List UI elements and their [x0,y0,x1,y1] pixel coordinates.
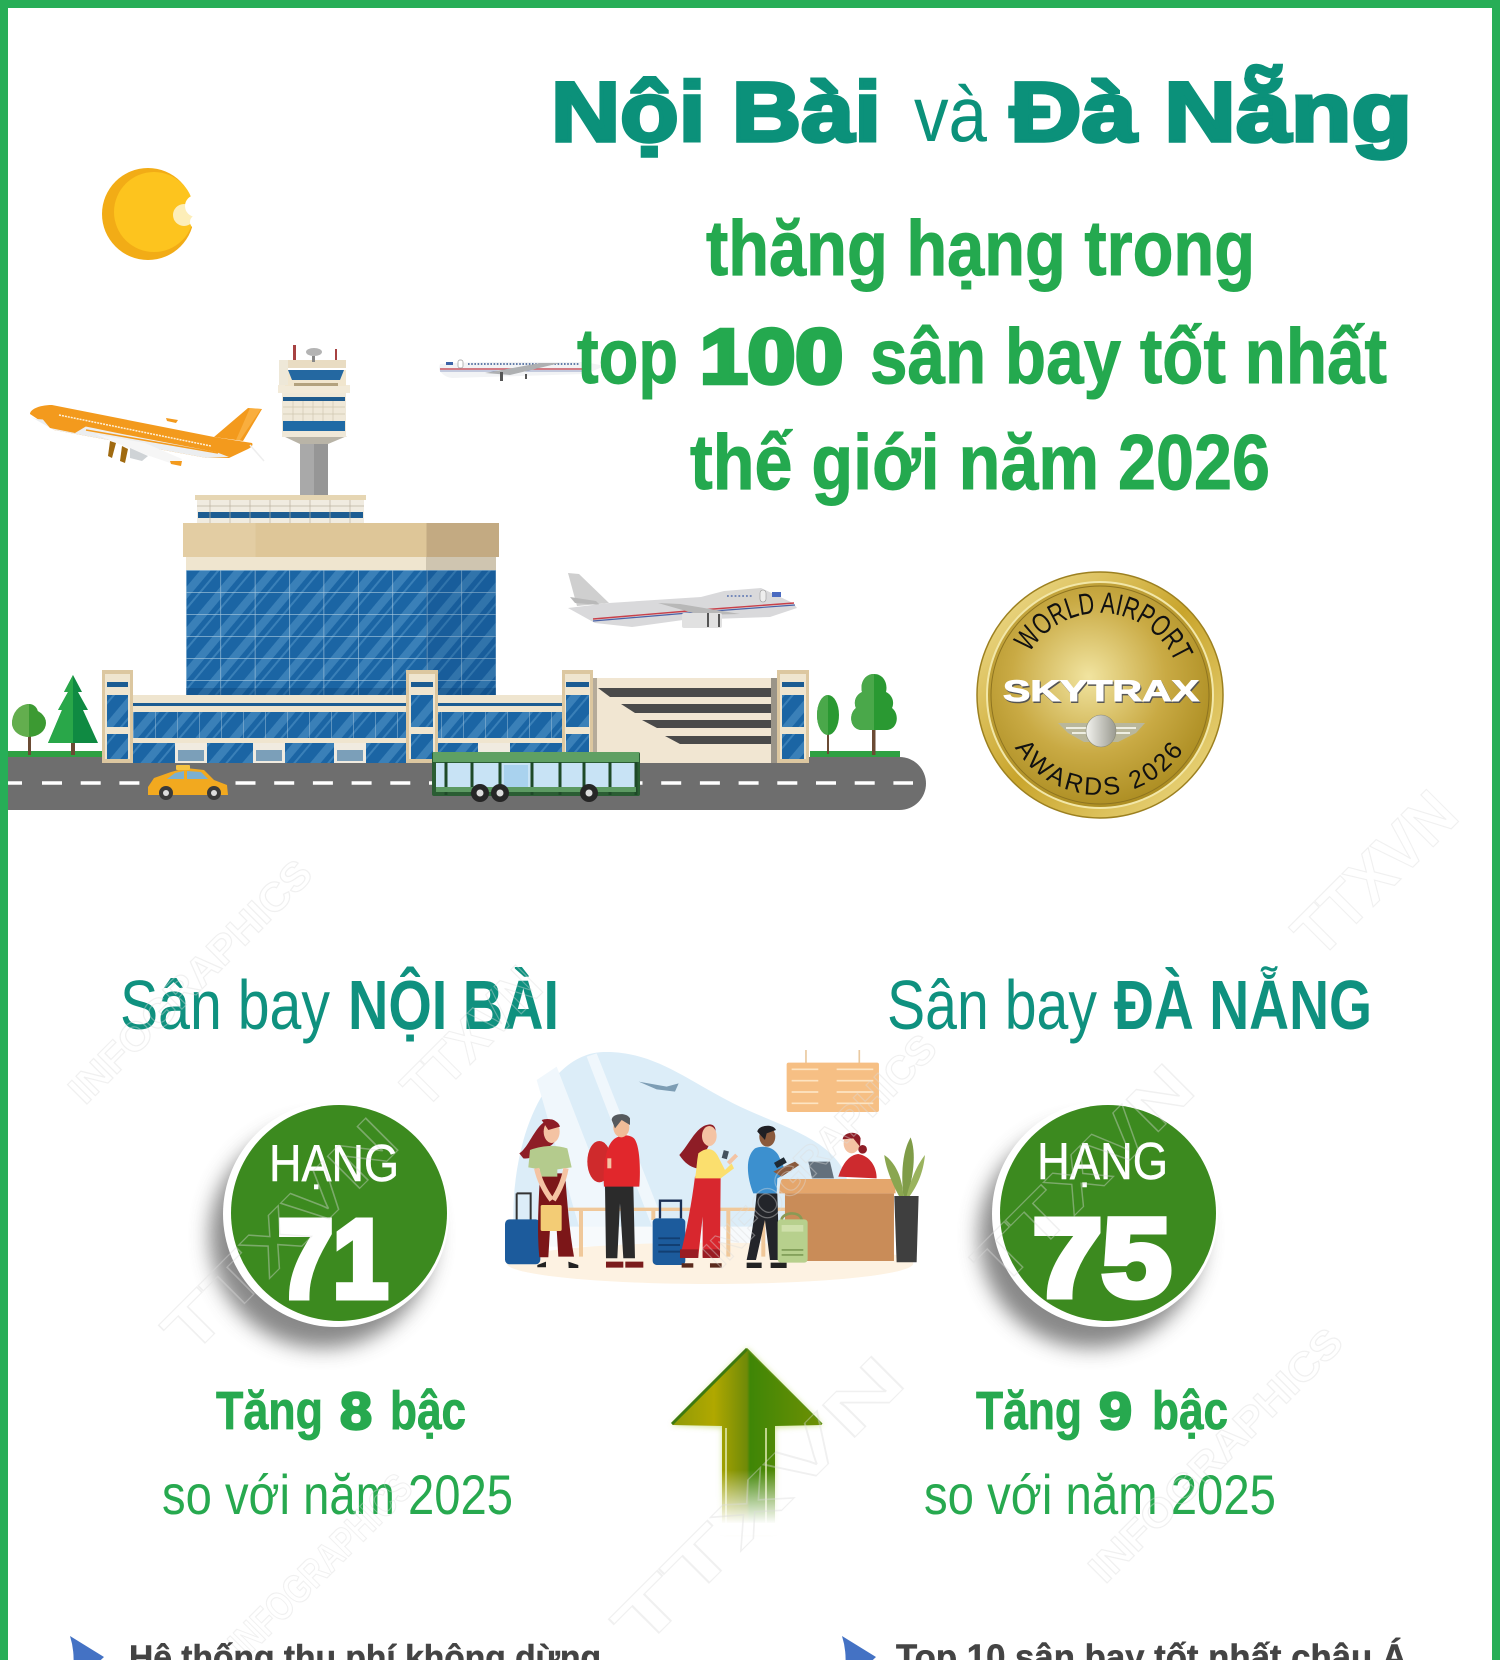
watermarks [60,776,1471,1660]
rail [568,1204,787,1214]
badge: Skytrax World Airport Awards 2026: SKYTRAX [1003,675,1199,708]
flight board [787,1050,879,1112]
heading: Noi Bai airport: Sân bay [120,966,330,1044]
rank badge: Da Nang: HẠNG [1037,1133,1168,1191]
text: Noi Bai rank change: bậc [390,1381,466,1441]
orange plane [30,405,264,466]
heading: Da Nang airport [887,965,1372,1044]
rank badge: Noi Bai: 71 [278,1198,388,1321]
text: Da Nang rank change [924,1381,1276,1526]
title [551,65,1412,159]
blue suitcase [653,1201,685,1265]
potted plant [884,1137,925,1262]
control tower [278,345,350,495]
title: Nội Bài [551,65,881,159]
title: Đà Nẵng [1010,65,1412,159]
heading: Da Nang airport: Sân bay [887,966,1097,1044]
arrow up [672,1348,823,1535]
text: Da Nang rank change: 9 [1099,1383,1132,1441]
watermarks: INFOGRAPHICS [220,1466,421,1660]
sky backdrop [513,1052,847,1237]
subtitle: sân bay tốt nhất [870,312,1387,400]
rank badge: Noi Bai [210,1101,449,1348]
parking building [593,670,809,763]
rank badge: Noi Bai: HẠNG [269,1135,399,1193]
green suitcase [778,1213,808,1263]
woman in red trousers [679,1124,737,1268]
icon: sun [102,168,207,260]
trees right [810,674,900,757]
text: Noi Bai rank change: 8 [340,1383,372,1441]
badge: Skytrax World Airport Awards 2026: AWARDS 2026 [1014,742,1182,795]
rank badge: Da Nang: 75 [1033,1197,1171,1320]
heading: Noi Bai airport [120,965,559,1044]
text: Da Nang rank change: bậc [1152,1381,1228,1441]
title: và [914,70,988,158]
watermarks: TTXVN [958,1050,1208,1300]
clerk [838,1133,877,1178]
watermarks: INFOGRAPHICS [60,851,321,1112]
low wing [133,695,562,763]
taxi [148,765,228,800]
text: Noi Bai rank change: so với năm 2025 [162,1463,513,1526]
text: Da Nang rank change: so với năm 2025 [924,1463,1276,1526]
woman with suitcase [505,1119,578,1268]
illustration: airport scene [8,345,926,810]
watermarks: TTXVN [1278,776,1471,970]
badge: Skytrax World Airport Awards 2026 [976,571,1224,819]
heading: Noi Bai airport: NỘI BÀI [348,965,559,1044]
subtitle: thế giới năm 2026 [690,418,1270,506]
watermarks: INFOGRAPHICS [695,1026,946,1276]
rank badge: Da Nang [979,1101,1218,1348]
man with backpack [587,1114,643,1268]
heading: Da Nang airport: ĐÀ NẴNG [1114,965,1372,1044]
pylons [102,670,593,763]
main terminal [183,495,499,695]
subtitle [577,204,1387,506]
text: Noi Bai rank change: Tăng [216,1381,323,1441]
watermarks: INFOGRAPHICS [1080,1320,1352,1591]
text: Da Nang rank change: Tăng [976,1381,1082,1441]
man in blue shirt [747,1126,799,1268]
badge: Skytrax World Airport Awards 2026: SKYTRAX [1004,676,1200,710]
watermarks: TTXVN [598,1341,919,1660]
grey plane [568,573,797,628]
watermarks: TTXVN [389,954,554,1118]
counter [779,1162,896,1261]
subtitle: 100 [700,314,843,400]
trees left [8,675,102,757]
white plane top [439,360,605,381]
road [8,757,926,810]
illustration: passengers at check-in desk [505,1050,925,1284]
subtitle: thăng hạng trong [706,204,1255,292]
text: Noi Bai rank change [162,1381,513,1526]
watermarks: TTXVN [148,1103,412,1368]
subtitle: top [577,312,678,400]
bus [432,752,640,802]
badge: Skytrax World Airport Awards 2026: WORLD AIRPORT [1012,592,1194,658]
